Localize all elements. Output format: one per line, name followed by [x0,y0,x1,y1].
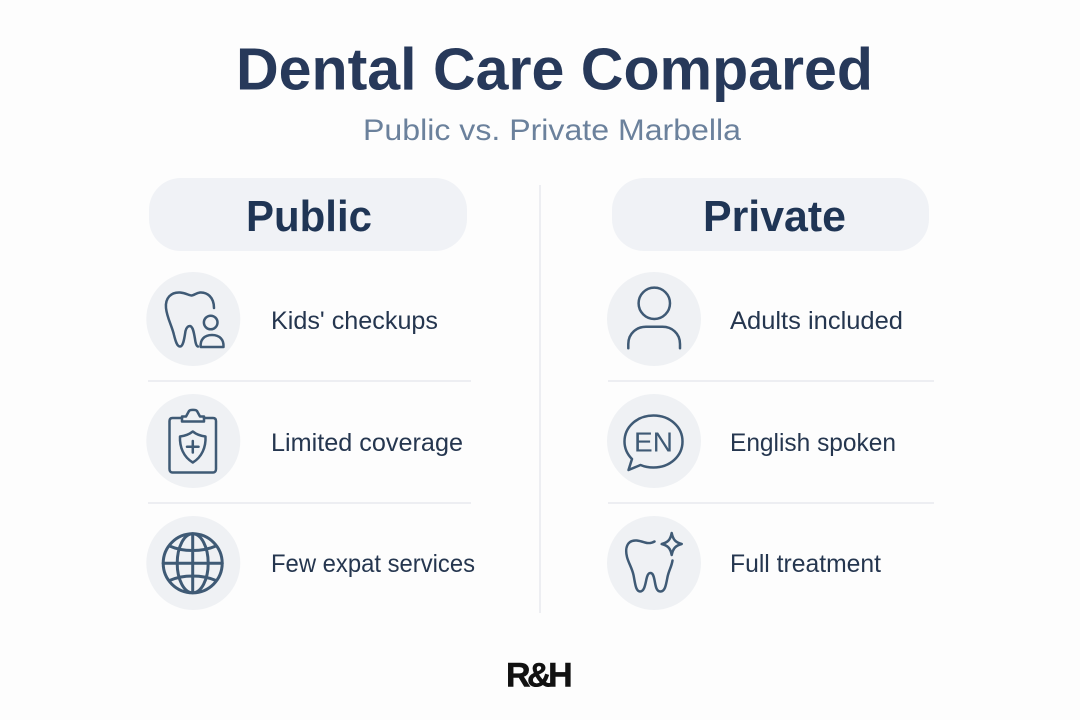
logo: R&H: R&H [506,656,571,694]
text: adults included: Adults included [730,307,903,335]
icon: tooth with sparkle [607,516,701,610]
text: full treatment: Full treatment [730,550,881,578]
heading: private: Private [703,192,846,241]
icon: globe [146,516,240,610]
heading: public: Public [246,192,372,241]
icon: clipboard with shield [146,394,240,488]
text: few expat services: Few expat services [271,550,475,578]
icon: speech bubble EN [607,394,701,488]
text: english spoken: English spoken [730,429,896,457]
icon: tooth with person [146,272,240,366]
heading: private [612,178,929,251]
heading: public [149,178,467,251]
title: Dental Care Compared [236,36,873,102]
subtitle: Public vs. Private Marbella [363,114,741,147]
text: kids' checkups: Kids' checkups [271,307,438,335]
icon: person [607,272,701,366]
text: limited coverage: Limited coverage [271,429,463,457]
icon: speech bubble EN: EN [634,426,673,458]
panel: private [607,178,934,610]
panel: public [146,178,475,610]
